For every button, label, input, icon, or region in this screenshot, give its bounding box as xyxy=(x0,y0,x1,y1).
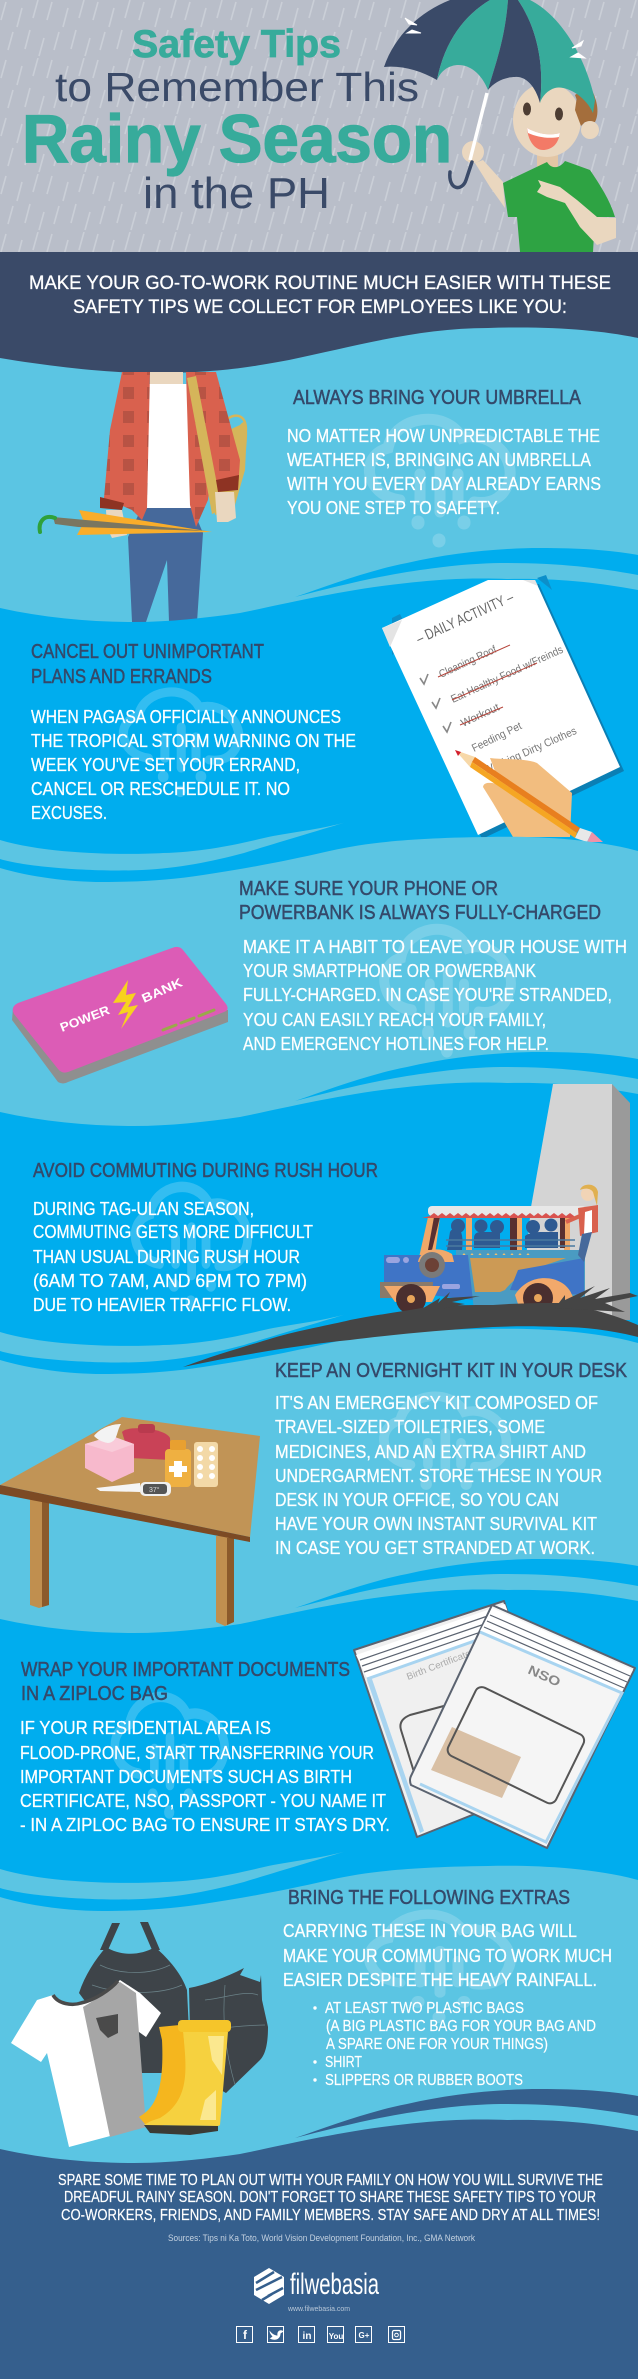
body text: AND EMERGENCY HOTLINES FOR HELP. xyxy=(243,1033,549,1054)
body text: THAN USUAL DURING RUSH HOUR xyxy=(33,1246,300,1267)
icon: cloud watermark xyxy=(369,419,510,541)
icon: dark hill with grass xyxy=(183,1286,638,1367)
social icons: G+ xyxy=(359,2331,370,2340)
body text: HAVE YOUR OWN INSTANT SURVIVAL KIT xyxy=(275,1513,597,1534)
body text: EXCUSES. xyxy=(31,802,107,823)
body text: IT'S AN EMERGENCY KIT COMPOSED OF xyxy=(275,1392,598,1413)
body text xyxy=(287,425,601,518)
bullet list: A SPARE ONE FOR YOUR THINGS) xyxy=(326,2036,548,2053)
title: to Remember This xyxy=(55,64,419,110)
body text: THE TROPICAL STORM WARNING ON THE xyxy=(31,730,356,751)
body text: IF YOUR RESIDENTIAL AREA IS xyxy=(20,1717,271,1738)
heading: IN A ZIPLOC BAG xyxy=(21,1683,168,1705)
icon: daily activity list: – DAILY ACTIVITY – xyxy=(414,589,517,648)
body text xyxy=(243,936,627,1054)
body text: - IN A ZIPLOC BAG TO ENSURE IT STAYS DRY. xyxy=(20,1814,390,1835)
icon: plastic bags xyxy=(79,1922,268,2093)
logo: filwebasia xyxy=(290,2268,379,2301)
wave xyxy=(0,1313,638,1692)
body text: NO MATTER HOW UNPREDICTABLE THE xyxy=(287,425,600,446)
heading: CANCEL OUT UNIMPORTANT xyxy=(31,641,264,663)
bullet list: AT LEAST TWO PLASTIC BAGS xyxy=(325,2000,524,2017)
panel: avoid commuting during rush hour xyxy=(0,1052,638,1404)
body text xyxy=(33,1198,313,1315)
body text: WEEK YOU'VE SET YOUR ERRAND, xyxy=(31,754,300,775)
heading: PLANS AND ERRANDS xyxy=(31,666,212,688)
wave xyxy=(0,821,638,1200)
wave xyxy=(0,548,638,900)
intro text xyxy=(29,272,611,318)
body text: IN CASE YOU GET STRANDED AT WORK. xyxy=(275,1537,595,1558)
body text xyxy=(275,1392,602,1558)
icon: cloud watermark xyxy=(135,1187,248,1303)
wave xyxy=(0,2089,638,2379)
header panel xyxy=(0,0,638,252)
body text: DUE TO HEAVIER TRAFFIC FLOW. xyxy=(33,1294,291,1315)
body text: DESK IN YOUR OFFICE, SO YOU CAN xyxy=(275,1489,559,1510)
logo xyxy=(254,2268,379,2313)
icon: commuter xyxy=(566,1185,598,1262)
icon: cloud watermark xyxy=(369,1914,510,2018)
icon: cloud watermark xyxy=(115,1697,225,1813)
social icons xyxy=(236,2326,404,2342)
body text: IMPORTANT DOCUMENTS SUCH AS BIRTH xyxy=(20,1766,352,1787)
front bag: nso: NSO xyxy=(526,1662,563,1690)
heading: POWERBANK IS ALWAYS FULLY-CHARGED xyxy=(239,902,601,924)
bullet list: (A BIG PLASTIC BAG FOR YOUR BAG AND xyxy=(326,2018,596,2035)
heading xyxy=(31,641,264,688)
bullet list xyxy=(313,2000,596,2089)
icon: rubber boots xyxy=(139,2020,231,2135)
icon: daily activity list: Cleaning Roof xyxy=(437,643,499,681)
icon: daily activity list: Feeding Pet xyxy=(470,720,524,755)
closing text xyxy=(58,2172,603,2224)
body text xyxy=(31,706,356,823)
panel: phone or powerbank charged xyxy=(0,821,638,1200)
panel: keep an overnight kit xyxy=(0,1286,638,1692)
wave xyxy=(0,1052,638,1404)
icon: boy with umbrella xyxy=(384,0,616,252)
panel: bring the following extras xyxy=(0,1850,638,2229)
heading: MAKE SURE YOUR PHONE OR xyxy=(239,878,498,900)
panel: footer xyxy=(0,2089,638,2379)
body text: YOU ONE STEP TO SAFETY. xyxy=(287,497,500,518)
title: Safety Tips xyxy=(132,23,341,66)
heading: ALWAYS BRING YOUR UMBRELLA xyxy=(293,387,582,409)
icon: daily activity list: Eat Healthy Food w/Freinds xyxy=(449,644,565,706)
title: in the PH xyxy=(143,169,330,218)
panel: cancel out unimportant plans xyxy=(0,548,638,900)
wave xyxy=(0,1850,638,2229)
icon: desk with emergency kit xyxy=(0,1417,260,1626)
intro banner xyxy=(0,252,638,373)
icon: person holding closed umbrella xyxy=(40,372,247,622)
bullet list: SHIRT xyxy=(325,2054,362,2071)
bullet list: SLIPPERS OR RUBBER BOOTS xyxy=(325,2072,523,2089)
front bag: nso xyxy=(410,1605,635,1848)
heading xyxy=(239,878,601,924)
social icons: f xyxy=(243,2328,248,2342)
body text: WHEN PAGASA OFFICIALLY ANNOUNCES xyxy=(31,706,341,727)
icon: desk with emergency kit: 37° xyxy=(149,1486,160,1494)
body text: DURING TAG-ULAN SEASON, xyxy=(33,1198,254,1219)
panel: always bring your umbrella xyxy=(40,372,601,622)
body text: CERTIFICATE, NSO, PASSPORT - YOU NAME IT xyxy=(20,1790,386,1811)
title xyxy=(22,23,452,218)
body text: WITH YOU EVERY DAY ALREADY EARNS xyxy=(287,473,601,494)
title: Rainy Season xyxy=(22,101,452,177)
body text: EASIER DESPITE THE HEAVY RAINFALL. xyxy=(283,1969,597,1990)
back bag: birth certificate: Birth Certificate xyxy=(405,1648,473,1683)
body text: COMMUTING GETS MORE DIFFICULT xyxy=(33,1221,313,1242)
intro text: MAKE YOUR GO-TO-WORK ROUTINE MUCH EASIER WITH THESE xyxy=(29,272,611,294)
icon: t-shirt xyxy=(11,1980,161,2147)
body text: WEATHER IS, BRINGING AN UMBRELLA xyxy=(287,449,592,470)
panel: wrap documents in ziploc xyxy=(0,1559,638,1911)
icon: power bank: POWER xyxy=(58,1003,112,1035)
heading: WRAP YOUR IMPORTANT DOCUMENTS xyxy=(21,1659,350,1681)
icon: ziploc bags xyxy=(354,1601,635,1848)
wave xyxy=(0,1559,638,1911)
icon: cloud watermark xyxy=(123,692,239,792)
heading xyxy=(21,1659,350,1705)
social icons: in xyxy=(303,2331,311,2342)
body text: CANCEL OR RESCHEDULE IT. NO xyxy=(31,778,290,799)
logo: www.filwebasia.com xyxy=(287,2304,350,2313)
body text xyxy=(283,1920,612,1990)
body text: TRAVEL-SIZED TOILETRIES, SOME xyxy=(275,1416,545,1437)
body text: CARRYING THESE IN YOUR BAG WILL xyxy=(283,1920,577,1941)
icon: power bank: BANK xyxy=(140,975,185,1006)
heading: BRING THE FOLLOWING EXTRAS xyxy=(288,1887,570,1909)
icon: daily activity list: Washing Dirty Clothes xyxy=(482,725,579,777)
body text: FLOOD-PRONE, START TRANSFERRING YOUR xyxy=(20,1742,374,1763)
back bag: birth certificate xyxy=(354,1601,560,1837)
intro text: SAFETY TIPS WE COLLECT FOR EMPLOYEES LIKE YOU: xyxy=(73,296,567,318)
body text: YOU CAN EASILY REACH YOUR FAMILY, xyxy=(243,1009,546,1030)
social icons: You xyxy=(329,2332,343,2341)
icon: jeepney xyxy=(380,1185,598,1320)
body text: MEDICINES, AND AN EXTRA SHIRT AND xyxy=(275,1441,586,1462)
icon: daily activity list: Workout xyxy=(459,702,501,730)
icon: cloud watermark xyxy=(384,1396,506,1500)
heading: AVOID COMMUTING DURING RUSH HOUR xyxy=(33,1160,378,1182)
body text: YOUR SMARTPHONE OR POWERBANK xyxy=(243,960,537,981)
icon: daily activity list xyxy=(382,575,624,842)
icon: power bank xyxy=(12,947,228,1084)
icon: monument xyxy=(520,1084,630,1320)
body text xyxy=(20,1717,390,1835)
icon: cloud watermark xyxy=(384,929,511,1051)
sources: Sources: Tips ni Ka Toto, World Vision Development Foundation, Inc., GMA Network xyxy=(168,2233,475,2243)
body text: (6AM TO 7AM, AND 6PM TO 7PM) xyxy=(33,1270,307,1291)
